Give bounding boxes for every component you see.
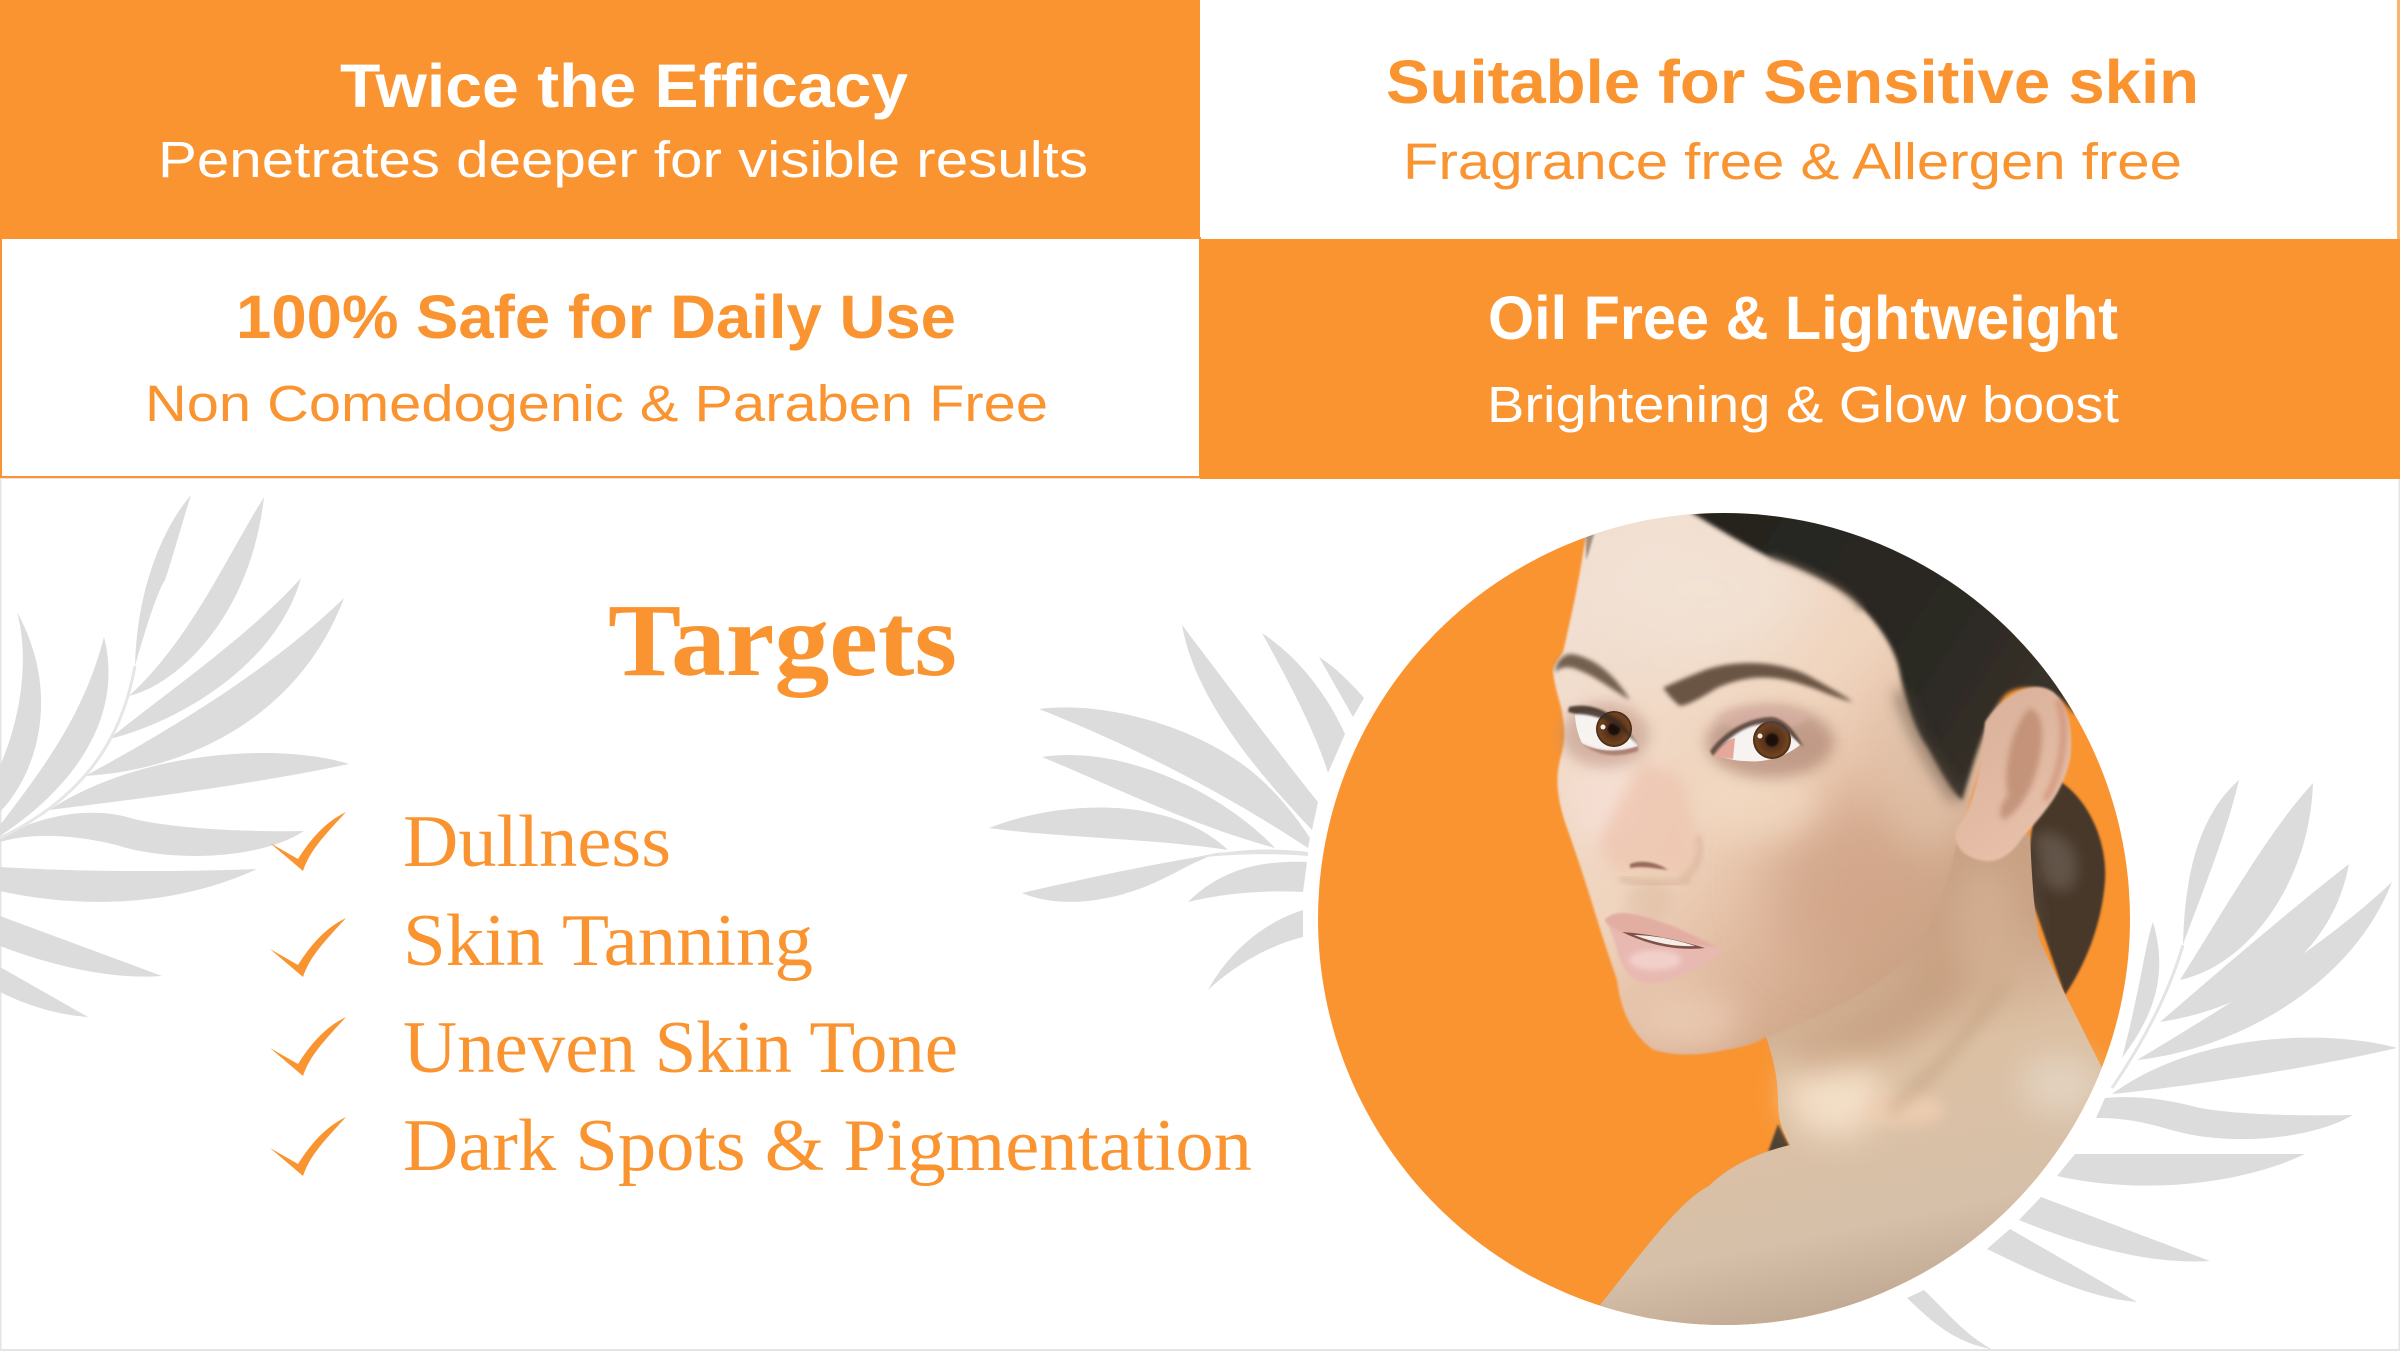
leaf: left palm frond <box>0 495 349 1017</box>
item: skin tanning: Skin Tanning <box>403 900 813 982</box>
neck and shoulder <box>1600 834 2106 1325</box>
panel: suitable for sensitive skin <box>1200 0 2400 239</box>
nose <box>1600 760 1700 884</box>
lips <box>1605 913 1722 983</box>
left eyebrow <box>1555 654 1630 700</box>
leaf: right palm frond <box>1907 780 2397 1350</box>
item: uneven skin tone: Uneven Skin Tone <box>403 1007 958 1089</box>
right eyebrow <box>1663 663 1853 706</box>
panel: oil free and lightweight <box>1200 239 2400 479</box>
portrait: woman in orange circle <box>1318 513 2130 1325</box>
section frame <box>0 478 2400 1350</box>
panel: twice the efficacy <box>0 0 1200 238</box>
heading: twice the efficacy: Twice the Efficacy <box>340 52 908 120</box>
panel: 100% safe for daily use <box>1 238 1200 477</box>
item: dullness <box>270 801 671 883</box>
hair <box>1584 513 2075 808</box>
heading: targets: Targets <box>608 583 957 698</box>
ear <box>1956 687 2071 861</box>
text: twice the efficacy subtitle: Penetrates deeper for visible results <box>158 131 1088 188</box>
heading: suitable for sensitive skin: Suitable for Sensitive skin <box>1386 48 2199 116</box>
text: suitable subtitle: Fragrance free & Allergen free <box>1403 133 2182 190</box>
heading: oil free: Oil Free & Lightweight <box>1488 284 2118 352</box>
item: dullness: Dullness <box>403 801 671 883</box>
right eye <box>1706 706 1834 778</box>
item: dark spots and pigmentation: Dark Spots & Pigmentation <box>403 1105 1252 1187</box>
text: 100% safe subtitle: Non Comedogenic & Paraben Free <box>145 375 1048 432</box>
checklist <box>270 801 1252 1187</box>
skin shading <box>1570 520 1980 1048</box>
leaf: middle palm frond <box>989 625 1364 990</box>
text: oil free subtitle: Brightening & Glow boost <box>1487 376 2119 433</box>
left eye <box>1561 703 1649 767</box>
face <box>1553 480 2000 1054</box>
heading: 100% safe: 100% Safe for Daily Use <box>236 283 956 351</box>
ponytail <box>2025 772 2105 995</box>
